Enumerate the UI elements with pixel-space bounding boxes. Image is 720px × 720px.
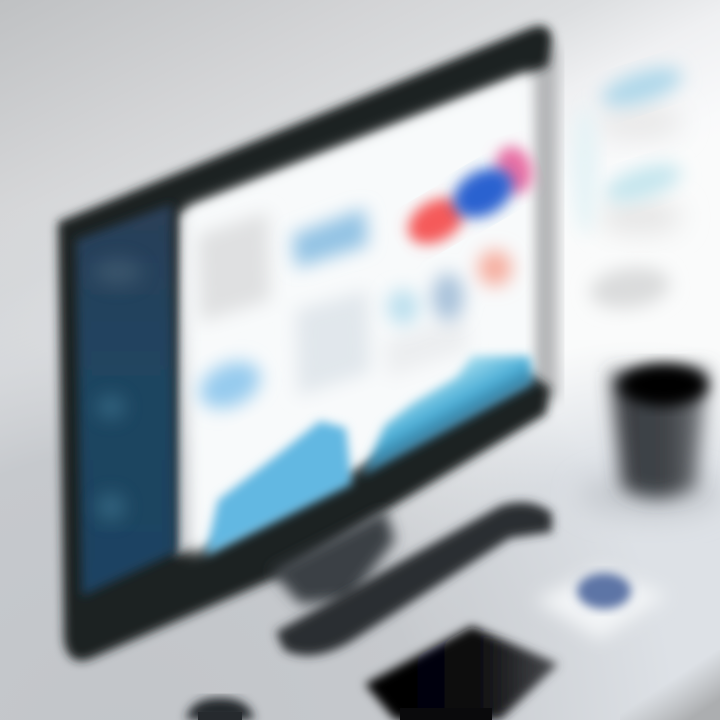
monitor [58, 26, 558, 661]
mug opening [620, 364, 708, 406]
chart: lower-left blue block [192, 352, 268, 418]
chart: red blue bars [400, 142, 538, 253]
sidebar items [94, 258, 142, 521]
faint light-blue glow beside monitor [573, 105, 597, 235]
card: bottom [588, 263, 672, 313]
screen [186, 72, 530, 556]
monitor bezel [58, 26, 552, 661]
mug shadow [578, 471, 720, 519]
monitor silver side edge [532, 46, 558, 405]
paper card with blue circle [535, 570, 668, 640]
mug body [610, 368, 708, 498]
chart: blue top block [292, 208, 368, 268]
tablet [365, 626, 558, 720]
sidebar [76, 204, 176, 596]
area chart: right hump [362, 356, 534, 476]
side cards: blurred floating panels [573, 60, 687, 313]
card: top [597, 60, 687, 140]
desk corner shadow [620, 650, 720, 720]
icon: blue circle [577, 573, 631, 609]
keyboard [276, 502, 552, 655]
desk surface shading [0, 200, 720, 720]
area chart: left hump [205, 421, 352, 556]
coffee mug [578, 364, 720, 519]
card: middle [598, 156, 686, 235]
mouse [186, 698, 254, 720]
screen faded panels [198, 212, 468, 396]
small chart marks [387, 250, 512, 325]
monitor stand [270, 510, 395, 604]
